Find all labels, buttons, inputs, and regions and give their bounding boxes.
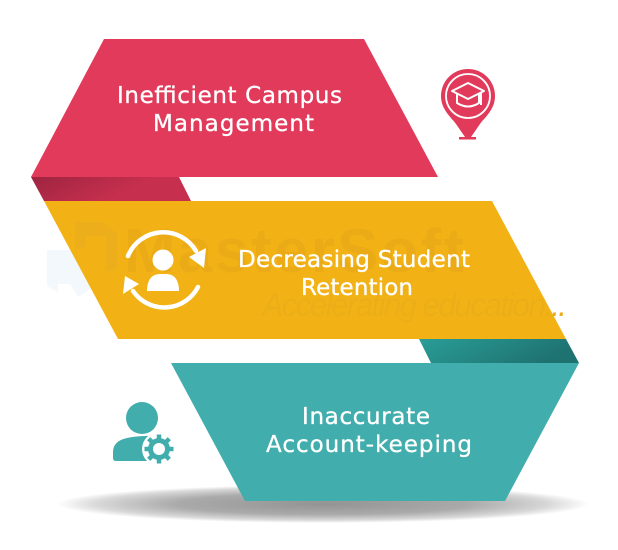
heading: decreasing student retention [238, 247, 470, 301]
heading: inaccurate account-keeping: Account-keeping [266, 432, 472, 458]
fold: red ribbon [31, 177, 191, 201]
ground shadow [57, 485, 589, 523]
watermark: mastersoft: Accelerating education... [260, 287, 567, 323]
heading: inaccurate account-keeping: Inaccurate [302, 404, 430, 430]
panel: inefficient campus management [31, 39, 438, 201]
fold: teal ribbon [419, 339, 579, 363]
icon: user with gear [113, 402, 176, 466]
heading: inefficient campus management: Inefficient Campus [117, 83, 342, 109]
panel: inaccurate account-keeping [171, 339, 579, 501]
heading: decreasing student retention: Decreasing Student [238, 247, 470, 273]
heading: inefficient campus management: Management [153, 111, 314, 137]
watermark: logo bracket on yellow [75, 222, 117, 272]
heading: inefficient campus management [117, 83, 342, 137]
watermark: mastersoft [124, 217, 567, 323]
icon: graduation cap map pin [441, 69, 495, 140]
watermark: logo mark on background [47, 250, 92, 297]
panel: decreasing student retention [44, 201, 567, 339]
icon: student with circular arrows [123, 232, 206, 307]
heading: decreasing student retention: Retention [301, 275, 413, 301]
watermark: mastersoft: MasterSoft [124, 217, 464, 286]
heading: inaccurate account-keeping [266, 404, 472, 458]
